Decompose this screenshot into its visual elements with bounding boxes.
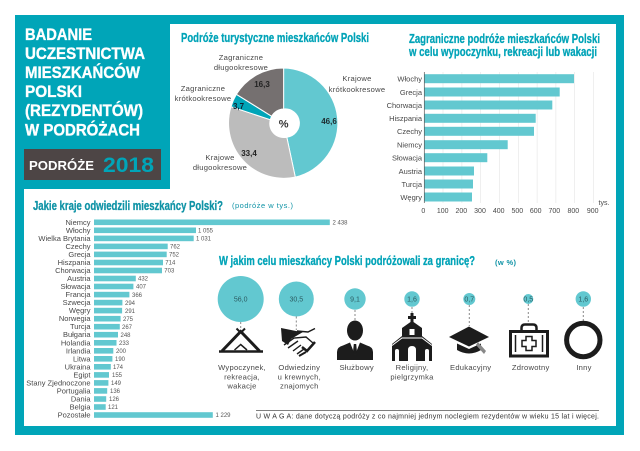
title (25, 26, 145, 140)
bubble 9,1: 9,1 (350, 296, 360, 304)
bar chart: foreign leisure trips: 700 (548, 208, 560, 215)
bar chart: countries visited: Niemcy (65, 218, 91, 227)
bar chart: foreign leisure trips: Węgry (400, 193, 422, 202)
bar chart: countries visited: 703 (164, 269, 175, 275)
bar chart: countries visited: 1 031 (196, 237, 212, 243)
bar chart: countries visited: 714 (165, 261, 176, 267)
label: visiting relatives: u krewnych, (278, 372, 321, 382)
bar chart: countries visited: Egipt (73, 370, 91, 379)
heading note: thousands of trips: (podróże w tys.) (232, 201, 294, 210)
pie label: krajowe krótkookresowe: Krajowe (342, 74, 372, 83)
bar chart: countries visited: 149 (111, 381, 122, 387)
title: (REZYDENTÓW) (25, 101, 143, 120)
bar chart: foreign leisure trips: Turcja (401, 180, 423, 189)
bar chart: countries visited: 407 (136, 285, 147, 291)
bar chart: foreign leisure trips: 400 (493, 208, 505, 215)
label: other: Inny (576, 363, 592, 372)
bar chart: foreign leisure trips: 800 (567, 208, 579, 215)
bar chart: countries visited: 248 (120, 333, 131, 339)
bar chart: countries visited: 762 (170, 245, 181, 251)
bar chart: foreign leisure trips: tys. (599, 200, 609, 207)
bubble 1,6 other (576, 291, 591, 307)
bar chart: countries visited: Belgia (70, 402, 91, 412)
bar chart: countries visited: 200 (116, 349, 127, 355)
pie label: zagraniczne krótkookresowe: Zagraniczne (181, 84, 225, 93)
label: visiting relatives: znajomych (280, 382, 319, 390)
pie label: zagraniczne długookresowe: Zagraniczne (219, 53, 263, 62)
heading: foreign leisure trips (408, 31, 600, 59)
bubble 30,5 (279, 282, 314, 316)
bar chart: countries visited: Chorwacja (55, 266, 91, 275)
bar chart: countries visited: 190 (115, 357, 126, 363)
icon: handshake (281, 328, 315, 356)
bubble 56,0 (218, 276, 264, 322)
bar chart: countries visited: 366 (132, 293, 143, 299)
title: UCZESTNICTWA (25, 45, 145, 63)
label: leisure: rekreacja, (224, 372, 260, 382)
bar chart: countries visited: 174 (113, 365, 124, 371)
heading note: percent: (w %) (495, 258, 516, 267)
icon: graduation cap (449, 326, 489, 354)
label: business: Służbowy (339, 363, 374, 372)
bar chart: countries visited: Ukraina (65, 362, 91, 371)
bar chart: countries visited: Turcja (70, 322, 91, 331)
bar chart: countries visited: 752 (169, 253, 180, 259)
bubble 0,7: 0,7 (464, 296, 474, 304)
icon: businessman (337, 320, 373, 360)
bar chart: foreign leisure trips: 500 (511, 208, 523, 215)
bar chart: countries visited: Holandia (61, 338, 91, 347)
bubble 1,6 religious: 1,6 (407, 296, 417, 304)
badge: Podróże 2018 (24, 149, 161, 180)
icon: tent (219, 328, 263, 352)
bar chart: countries visited: 136 (110, 389, 121, 395)
bar chart: foreign leisure trips: Niemcy (397, 140, 422, 150)
bubble 0,7 (463, 293, 475, 305)
dashed connectors (241, 304, 583, 330)
pie value 3,7: 3,7 (233, 102, 245, 111)
bar chart: countries visited: Francja (65, 290, 91, 299)
label: leisure: Wypoczynek, (218, 363, 266, 372)
pie label: zagraniczne krótkookresowe: krótkookresowe (175, 94, 231, 103)
bubble 30,5: 30,5 (289, 296, 303, 304)
bar chart: countries visited: Grecja (68, 250, 91, 259)
bar chart: countries visited: Pozostałe (58, 410, 90, 420)
bar chart: countries visited: 155 (112, 373, 123, 379)
bar chart: foreign leisure trips: Czechy (397, 127, 422, 136)
bar chart: foreign leisure trips: 900 (587, 208, 599, 215)
bar chart: countries visited: 294 (125, 301, 136, 307)
label: religious: pielgrzymka (390, 372, 434, 382)
heading: purpose of trips abroad: W jakim celu mieszkańcy Polski podróżowali za granicę? (219, 253, 475, 268)
bar chart: foreign leisure trips: Słowacja (392, 154, 423, 162)
title: MIESZKAŃCÓW (25, 63, 140, 82)
bar chart: foreign leisure trips: 200 (455, 208, 467, 215)
bar chart: countries visited: 267 (122, 325, 133, 331)
bubble 1,6 religious (404, 291, 420, 307)
bar chart: foreign leisure trips: Grecja (400, 88, 423, 97)
icon: ring (567, 323, 600, 357)
bar chart: foreign leisure trips: 300 (474, 208, 486, 215)
bar chart: countries visited: 2 438 (332, 220, 348, 226)
title: W PODRÓŻACH (25, 120, 140, 140)
icon: medical kit (510, 324, 548, 356)
bar chart: countries visited: Węgry (69, 306, 91, 315)
bar chart: countries visited: Włochy (66, 226, 91, 235)
badge: Podróże 2018: 2018 (103, 154, 154, 177)
label: educational: Edukacyjny (450, 363, 491, 372)
pie chart (175, 53, 385, 178)
bar chart: countries visited: Wielka Brytania (38, 234, 91, 243)
bar chart: countries visited: Hiszpania (58, 258, 91, 267)
bar chart: countries visited: 291 (125, 309, 136, 315)
badge: Podróże 2018: PODRÓŻE (29, 158, 94, 173)
pie label: krajowe długookresowe: Krajowe (205, 153, 235, 162)
pie value 16,3: 16,3 (254, 80, 270, 89)
bar chart: foreign leisure trips: Chorwacja (387, 101, 423, 110)
bar chart: countries visited: Portugalia (57, 386, 91, 395)
bar chart: foreign leisure trips: Austria (399, 167, 423, 176)
pie value 46,6: 46,6 (321, 117, 337, 126)
bar chart: countries visited: 432 (138, 277, 149, 283)
bubble 9,1 (344, 288, 366, 310)
bubble 0,5 (523, 294, 533, 304)
bar chart: foreign leisure trips: 100 (437, 208, 449, 215)
bar chart: countries visited: Irlandia (66, 346, 91, 355)
title: POLSKI (25, 83, 82, 101)
bar chart: countries visited: Litwa (73, 354, 91, 363)
label: leisure: wakacje (226, 382, 257, 390)
bar chart: countries visited: 233 (119, 341, 130, 347)
bar chart: foreign leisure trips: Hiszpania (389, 114, 423, 123)
bar chart: countries visited: 121 (108, 405, 119, 411)
bar chart: countries visited: 126 (109, 397, 120, 403)
bubble 1,6 other: 1,6 (578, 296, 588, 304)
bar chart: countries visited: Dania (71, 394, 91, 404)
icon: church (392, 313, 432, 361)
bar chart: countries visited: Czechy (65, 242, 91, 251)
bar chart: foreign leisure trips (387, 72, 609, 215)
pie chart: % (279, 118, 289, 130)
pie label: zagraniczne długookresowe: długookresowe (214, 63, 268, 72)
bar chart: foreign leisure trips: 600 (530, 208, 542, 215)
bar chart: foreign leisure trips: 0 (421, 208, 425, 215)
bar chart: countries visited: Norwegia (59, 314, 91, 323)
pie label: krajowe długookresowe: długookresowe (193, 163, 247, 172)
bar chart: countries visited: Szwecja (63, 298, 91, 307)
pie value 33,4: 33,4 (241, 149, 257, 158)
bar chart: foreign leisure trips: Włochy (397, 74, 422, 84)
heading: pie chart: Podróże turystyczne mieszkańców Polski (181, 30, 369, 45)
bar chart: countries visited: 275 (123, 317, 134, 323)
footnote: U W A G A: dane dotyczą podróży z co najmniej jednym noclegiem rezydentów w wieku 15 lat i więcej. (256, 414, 599, 420)
bubble 0,5: 0,5 (523, 296, 533, 304)
bar chart: countries visited (26, 218, 348, 420)
bubble 56,0: 56,0 (234, 296, 248, 304)
bar chart: countries visited: Bułgaria (63, 330, 91, 339)
heading: countries visited: Jakie kraje odwiedzili mieszkańcy Polski? (33, 198, 223, 213)
bar chart: countries visited: 1 055 (198, 228, 214, 234)
bar chart: countries visited: Słowacja (60, 282, 91, 291)
label: health: Zdrowotny (512, 363, 550, 372)
label: visiting relatives: Odwiedziny (278, 363, 320, 372)
title: BADANIE (25, 26, 92, 44)
bar chart: countries visited: 1 229 (216, 413, 231, 419)
label: religious: Religijny, (396, 363, 428, 372)
bar chart: countries visited: Stany Zjednoczone (26, 378, 90, 387)
bar chart: countries visited: Austria (67, 274, 91, 283)
pie label: krajowe krótkookresowe: krótkookresowe (329, 85, 385, 94)
